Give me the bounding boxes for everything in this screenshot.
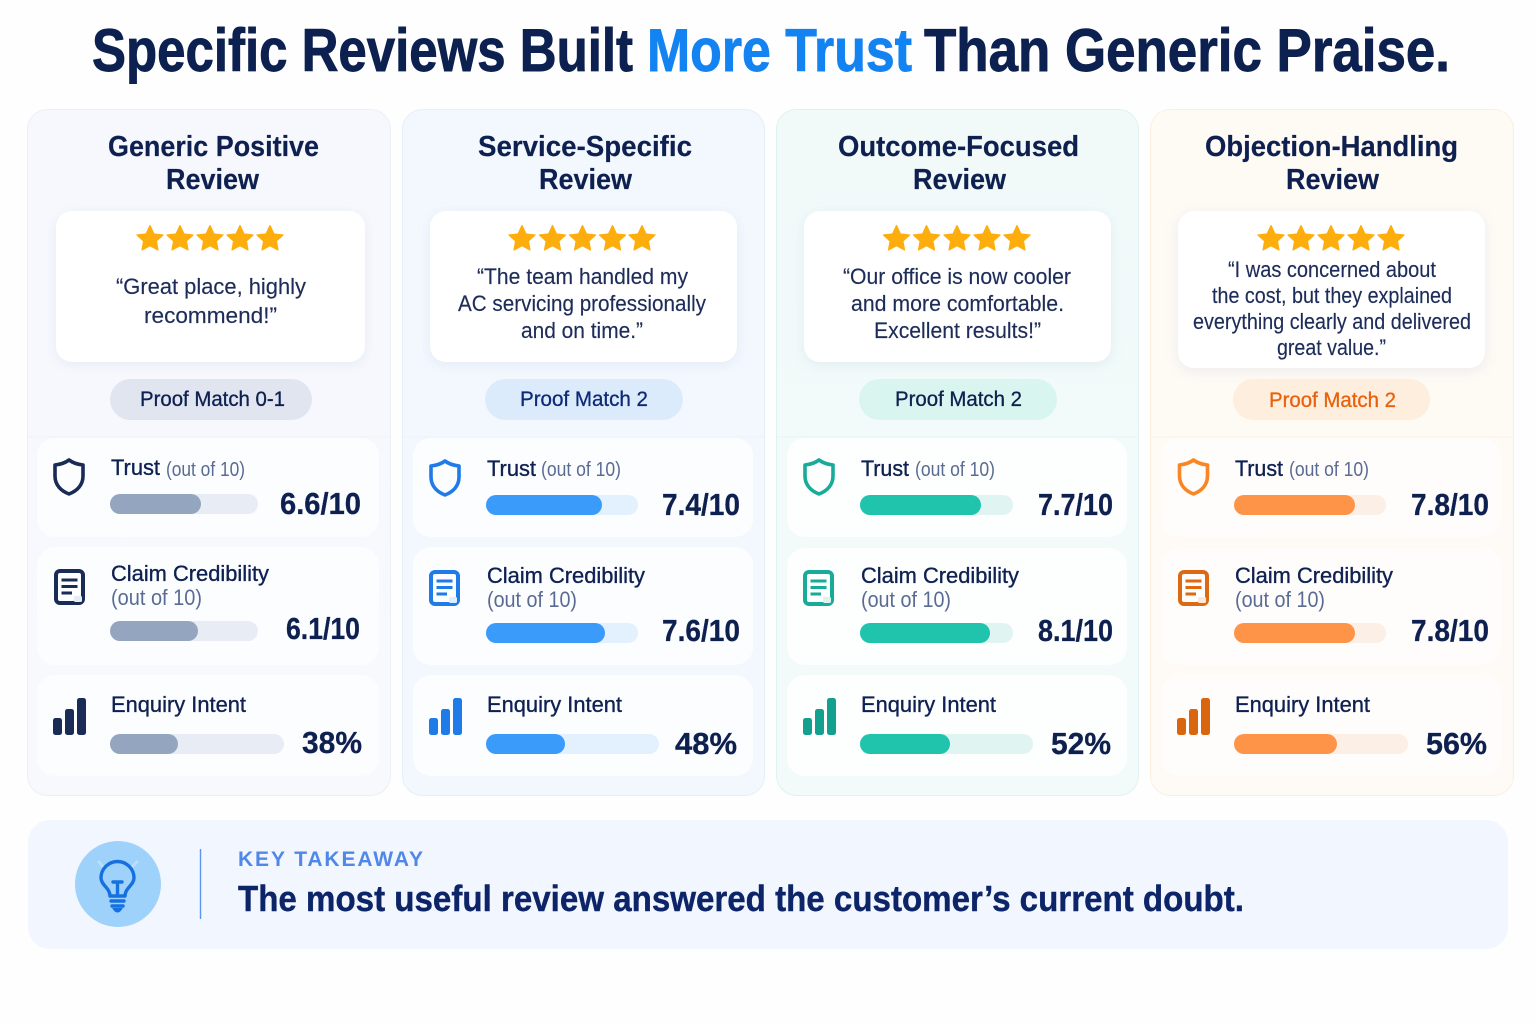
star rating — [1258, 226, 1404, 250]
review quote — [1193, 257, 1471, 360]
enquiry intent bar — [1234, 734, 1408, 754]
claim credibility label — [487, 563, 645, 612]
metric: claim credibility — [787, 548, 1127, 665]
review quote: great value.” — [1277, 335, 1386, 360]
panel heading: Service-Specific — [478, 131, 692, 163]
enquiry intent value: 48% — [675, 726, 737, 761]
proof match pill: Proof Match 2 — [895, 388, 1022, 411]
claim credibility bar — [860, 623, 1013, 643]
key takeaway label: KEY TAKEAWAY — [238, 848, 423, 871]
trust value: 6.6/10 — [280, 486, 361, 521]
metric: trust — [413, 438, 753, 537]
panel: generic positive review — [28, 110, 390, 796]
review quote — [458, 264, 706, 343]
panel heading: Objection-Handling — [1205, 131, 1458, 163]
enquiry intent value: 38% — [302, 725, 362, 760]
key takeaway statement: The most useful review answered the customer’s current doubt. — [238, 878, 1244, 919]
review quote: “I was concerned about — [1228, 257, 1436, 282]
enquiry intent bar — [860, 734, 1033, 754]
trust label — [1235, 456, 1369, 481]
panel heading — [838, 131, 1079, 196]
claim credibility label: Claim Credibility — [487, 563, 645, 588]
metric: enquiry intent — [787, 675, 1127, 776]
claim credibility label: (out of 10) — [861, 587, 951, 612]
icon: shield — [1180, 460, 1208, 494]
metric: claim credibility — [413, 547, 753, 665]
panel heading: Review — [1286, 164, 1379, 196]
trust label — [487, 456, 621, 481]
panel: key takeaway — [28, 820, 1508, 949]
claim credibility label — [111, 561, 269, 610]
trust label: (out of 10) — [915, 459, 995, 481]
metric: trust — [1161, 438, 1501, 537]
trust bar — [1234, 495, 1386, 515]
enquiry intent bar — [486, 734, 659, 754]
icon: shield — [55, 460, 83, 494]
panel heading: Outcome-Focused — [838, 131, 1079, 163]
review quote: and more comfortable. — [851, 291, 1064, 316]
trust label: Trust — [1235, 456, 1283, 481]
claim credibility value: 7.8/10 — [1411, 613, 1489, 648]
review quote — [116, 274, 306, 328]
review card — [1178, 211, 1485, 368]
claim credibility value: 6.1/10 — [286, 611, 360, 646]
trust label: (out of 10) — [166, 459, 245, 481]
claim credibility bar — [486, 623, 638, 643]
review quote — [843, 264, 1071, 343]
icon: shield — [805, 460, 833, 494]
panel heading: Review — [913, 164, 1006, 196]
metric: claim credibility — [1161, 548, 1501, 665]
review card — [804, 211, 1111, 362]
review quote: “The team handled my — [477, 264, 688, 289]
claim credibility bar — [1234, 623, 1386, 643]
review card — [430, 211, 737, 362]
trust label — [111, 455, 245, 481]
metric: trust — [787, 438, 1127, 537]
icon: document — [1180, 572, 1207, 604]
claim credibility label: (out of 10) — [487, 587, 577, 612]
panel heading — [1205, 131, 1458, 196]
claim credibility bar — [110, 621, 258, 641]
enquiry intent bar — [110, 734, 284, 754]
icon: document — [56, 571, 83, 603]
icon: document — [805, 572, 832, 604]
claim credibility label: Claim Credibility — [861, 563, 1019, 588]
title: Than Generic Praise. — [924, 17, 1450, 84]
enquiry intent label: Enquiry Intent — [861, 692, 996, 717]
title — [92, 17, 1450, 84]
trust value: 7.8/10 — [1411, 487, 1489, 522]
review quote: “Great place, highly — [116, 274, 306, 299]
trust bar — [486, 495, 638, 515]
title: More Trust — [647, 17, 912, 84]
review card — [56, 211, 365, 362]
proof match pill — [110, 379, 312, 420]
star rating — [137, 226, 283, 250]
panel: service-specific review — [402, 110, 764, 796]
trust value: 7.4/10 — [662, 487, 740, 522]
claim credibility label: (out of 10) — [1235, 587, 1325, 612]
trust label: Trust — [861, 456, 909, 481]
claim credibility value: 8.1/10 — [1038, 613, 1113, 648]
panel: outcome-focused review — [776, 110, 1138, 796]
icon: bars — [1177, 698, 1210, 735]
metric: enquiry intent — [1161, 675, 1501, 776]
claim credibility label — [1235, 563, 1393, 612]
panel heading: Generic Positive — [108, 131, 319, 163]
claim credibility label: Claim Credibility — [1235, 563, 1393, 588]
trust label — [861, 456, 995, 481]
star rating — [884, 226, 1030, 250]
panel heading — [108, 131, 319, 196]
metric: enquiry intent — [413, 675, 753, 776]
enquiry intent label: Enquiry Intent — [111, 692, 246, 717]
star rating — [509, 226, 655, 250]
icon: document — [431, 572, 458, 604]
proof match pill: Proof Match 0-1 — [140, 388, 285, 411]
panel: objection-handling review — [1150, 110, 1514, 796]
proof match pill: Proof Match 2 — [520, 388, 648, 411]
claim credibility label: (out of 10) — [111, 585, 202, 610]
icon: bars — [803, 698, 836, 735]
enquiry intent value: 52% — [1051, 726, 1111, 761]
trust bar — [110, 494, 258, 514]
title: Specific Reviews Built — [92, 17, 633, 84]
metric: enquiry intent — [37, 675, 379, 776]
review quote: Excellent results!” — [874, 318, 1041, 343]
review quote: recommend!” — [144, 303, 277, 328]
trust bar — [860, 495, 1013, 515]
panel heading: Review — [166, 164, 259, 196]
enquiry intent label: Enquiry Intent — [487, 692, 622, 717]
review quote: the cost, but they explained — [1212, 283, 1452, 308]
trust label: Trust — [111, 455, 160, 480]
enquiry intent value: 56% — [1426, 726, 1487, 761]
claim credibility value: 7.6/10 — [662, 613, 740, 648]
icon: light bulb — [75, 841, 161, 927]
proof match pill — [1233, 379, 1430, 420]
trust label: (out of 10) — [541, 459, 621, 481]
review quote: and on time.” — [521, 318, 643, 343]
proof match pill — [485, 379, 683, 420]
trust label: Trust — [487, 456, 536, 481]
icon: bars — [429, 698, 462, 735]
claim credibility label: Claim Credibility — [111, 561, 269, 586]
enquiry intent label: Enquiry Intent — [1235, 692, 1370, 717]
icon: shield — [431, 461, 459, 495]
proof match pill: Proof Match 2 — [1269, 389, 1396, 412]
metric: claim credibility — [37, 547, 379, 665]
trust value: 7.7/10 — [1038, 487, 1113, 522]
metric: trust — [37, 438, 379, 537]
review quote: AC servicing professionally — [458, 291, 706, 316]
claim credibility label — [861, 563, 1019, 612]
icon: bars — [53, 698, 86, 735]
panel heading: Review — [539, 164, 632, 196]
review quote: “Our office is now cooler — [843, 264, 1071, 289]
review quote: everything clearly and delivered — [1193, 309, 1471, 334]
panel heading — [478, 131, 692, 196]
proof match pill — [859, 379, 1057, 420]
trust label: (out of 10) — [1289, 459, 1369, 481]
